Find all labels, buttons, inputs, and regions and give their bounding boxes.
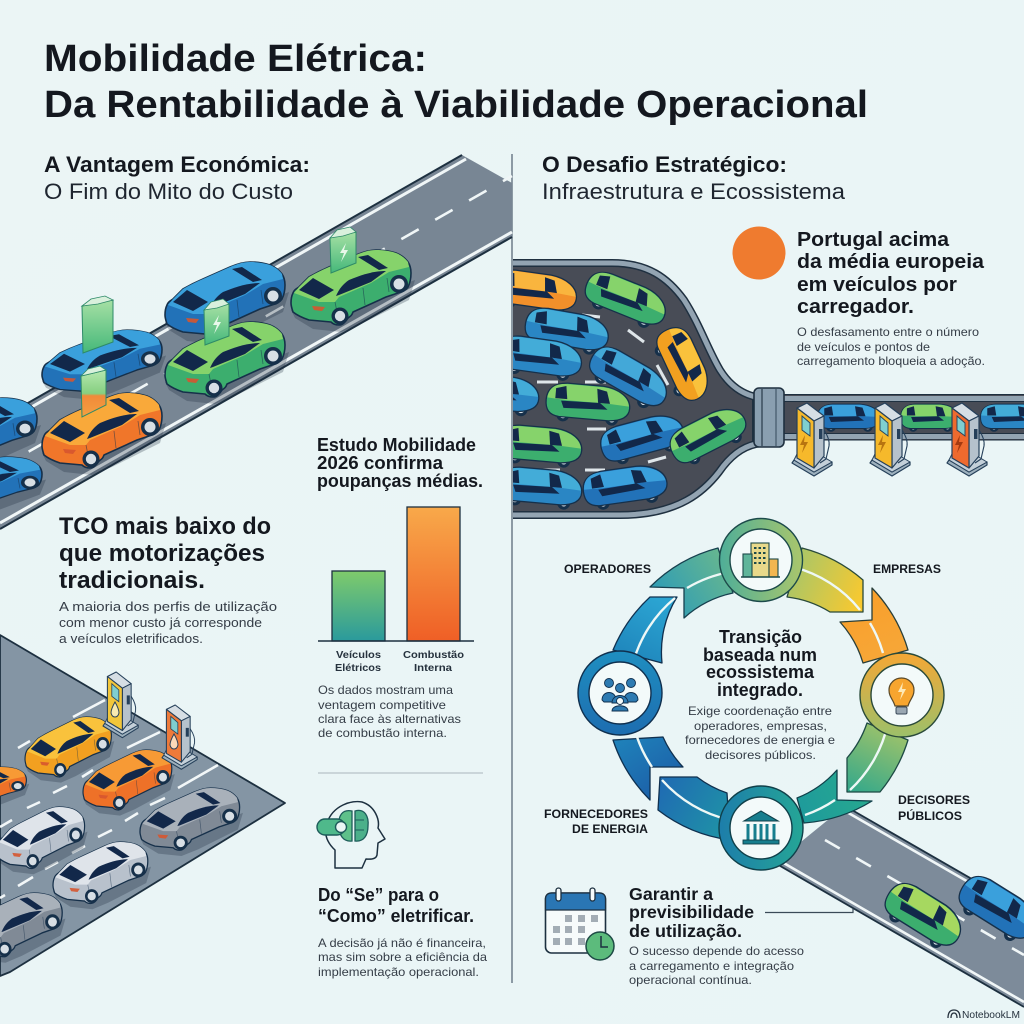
- node: people: [578, 651, 662, 735]
- icon: battery full with bolt 1: [330, 227, 356, 273]
- text block: TCO: tradicionais.: [59, 567, 205, 594]
- segment: right lower: [847, 723, 908, 792]
- text block: ring centre: operadores, empresas,: [694, 719, 827, 733]
- heading: economic advantage: A Vantagem Económica:: [44, 152, 310, 177]
- icon: charger orange: [947, 403, 987, 476]
- heading: economic advantage: O Fim do Mito do Custo: [44, 179, 293, 204]
- axis labels: [335, 649, 464, 674]
- text block: ring centre: Exige coordenação entre: [688, 704, 832, 718]
- car: blue on road: [951, 869, 1024, 949]
- text block: predictability: a carregamento e integração: [629, 959, 794, 973]
- heading: strategic challenge: [542, 152, 846, 204]
- car: green in tube: [901, 404, 959, 432]
- text block: competitive advantage: [318, 683, 461, 740]
- car: blue clipped low: [0, 457, 46, 518]
- text block: ring centre: baseada num: [703, 645, 817, 665]
- icon: calendar with clock: [546, 888, 614, 960]
- text block: competitive advantage: de combustão interna.: [318, 726, 447, 740]
- label: public decision makers: DECISORES: [898, 793, 970, 807]
- orange circle marker: [732, 226, 786, 280]
- segment: left lower: [613, 737, 683, 800]
- icon: battery full with bolt 2: [204, 299, 229, 345]
- road: lower left with combustion cars: [0, 635, 285, 976]
- node: buildings: [720, 518, 802, 602]
- node: light bulb: [860, 653, 944, 737]
- text block: predictability: Garantir a: [629, 884, 713, 904]
- car: blue in tube: [818, 404, 880, 432]
- car: orange: [83, 750, 175, 816]
- text block: ring centre: Transição: [719, 627, 802, 647]
- text block: from if to how: mas sim sobre a eficiência da: [318, 950, 487, 964]
- icon: battery full: [82, 296, 113, 353]
- text block: from if to how: implementação operacional.: [318, 965, 479, 979]
- text block: ring centre: decisores públicos.: [705, 748, 816, 762]
- icon: orange fuel pump: [162, 705, 197, 769]
- car: silver: [53, 842, 151, 909]
- icon: battery half orange: [81, 366, 106, 417]
- segment: right upper: [840, 588, 908, 663]
- bar: internal combustion: [407, 507, 460, 641]
- heading: strategic challenge: Infraestrutura e Ecossistema: [542, 179, 846, 204]
- label: companies: EMPRESAS: [873, 562, 941, 576]
- car: yellow diagonal: [654, 327, 708, 401]
- car: blue 5: [513, 466, 582, 510]
- car: blue clipped: [513, 376, 540, 416]
- label: energy suppliers: [544, 807, 648, 836]
- text block: Portugal: em veículos por: [797, 273, 957, 296]
- text block: ring centre: ecossistema: [706, 662, 815, 682]
- text block: TCO: que motorizações: [59, 540, 265, 567]
- car: orange in pipe: [513, 269, 578, 310]
- text block: ring centre: fornecedores de energia e: [685, 733, 835, 747]
- bottleneck pipe with crowded cars: [454, 263, 1024, 515]
- axis labels: Interna: [414, 662, 452, 674]
- text block: from if to how: [318, 884, 487, 979]
- car: blue in tube right: [980, 404, 1024, 432]
- car: dark grey clipped: [0, 893, 65, 963]
- segment: bottom left: [658, 777, 730, 840]
- car: silver left: [0, 807, 88, 874]
- label: public decision makers: PÚBLICOS: [898, 808, 962, 823]
- car: green on road: [877, 876, 969, 956]
- text block: TCO: a veículos eletrificados.: [59, 632, 203, 646]
- segment: bottom right: [797, 770, 872, 823]
- node: government building: [719, 786, 803, 870]
- text heading: study 2026: poupanças médias.: [317, 471, 483, 491]
- road: lower right: [775, 806, 1024, 1007]
- icon: head with brain and toggle: [317, 802, 385, 868]
- car: blue clipped: [0, 398, 41, 472]
- text block: TCO: [59, 513, 277, 646]
- car: blue 1: [524, 308, 609, 355]
- text block: Portugal: carregador.: [797, 295, 914, 318]
- axis labels: Elétricos: [335, 662, 381, 674]
- text block: Portugal: da média europeia: [797, 250, 985, 273]
- flange: [754, 388, 784, 447]
- title: Mobilidade Elétrica:: [44, 38, 427, 80]
- segment: top left: [650, 548, 733, 618]
- car: blue 3: [589, 346, 667, 408]
- axis labels: Veículos: [336, 649, 381, 661]
- text block: Portugal: [797, 228, 985, 368]
- axis labels: Combustão: [403, 649, 464, 661]
- icon: yellow fuel pump: [103, 672, 138, 738]
- text block: competitive advantage: ventagem competitive: [318, 698, 446, 712]
- text heading: study 2026: 2026 confirma: [317, 453, 444, 473]
- text block: predictability: de utilização.: [629, 921, 742, 941]
- callout line: [765, 909, 853, 912]
- bar: electric vehicles: [332, 571, 385, 641]
- road: upper left with electric cars: [0, 155, 512, 529]
- text block: predictability: O sucesso depende do acesso: [629, 944, 804, 958]
- car: green with battery: [291, 250, 415, 332]
- text block: Portugal: Portugal acima: [797, 228, 950, 251]
- car: blue 2: [513, 335, 582, 381]
- text block: predictability: previsibilidade: [629, 902, 754, 922]
- car: blue front: [42, 330, 166, 400]
- narrow pipe: [784, 394, 1024, 440]
- text block: ring centre: integrado.: [717, 680, 803, 700]
- heading: economic advantage: [44, 152, 310, 204]
- text block: predictability: operacional contínua.: [629, 973, 752, 987]
- text block: Portugal: de veículos e pontos de: [797, 340, 930, 354]
- text block: TCO: A maioria dos perfis de utilização: [59, 600, 277, 614]
- text block: competitive advantage: clara face às alternativas: [318, 712, 461, 726]
- icon: charger yellow 1: [792, 403, 832, 476]
- bar chart: cost comparison: [318, 507, 474, 674]
- text block: from if to how: A decisão já não é financeira,: [318, 936, 486, 950]
- car: green 3: [513, 424, 582, 468]
- car: blue 4: [600, 415, 683, 464]
- text block: competitive advantage: Os dados mostram uma: [318, 683, 453, 697]
- car: blue rear: [165, 262, 289, 344]
- watermark: NotebookLM: NotebookLM: [962, 1009, 1020, 1021]
- car: orange clipped: [0, 767, 29, 813]
- text block: TCO: TCO mais baixo do: [59, 513, 271, 540]
- car: orange: [42, 393, 166, 475]
- car: green 4: [670, 408, 746, 464]
- title: Da Rentabilidade à Viabilidade Operacional: [44, 84, 868, 126]
- text heading: study 2026: Estudo Mobilidade: [317, 435, 476, 455]
- label: energy suppliers: DE ENERGIA: [572, 822, 648, 836]
- text block: from if to how: “Como” eletrificar.: [318, 905, 474, 926]
- label: public decision makers: [898, 793, 970, 823]
- segment: left upper: [613, 597, 677, 663]
- centre vertical divider: [511, 154, 513, 983]
- icon: charger yellow 2: [870, 403, 910, 476]
- text block: TCO: com menor custo já corresponde: [59, 616, 262, 630]
- car: green 2: [544, 381, 631, 427]
- car: green 1: [584, 272, 666, 328]
- text block: from if to how: Do “Se” para o: [318, 884, 439, 905]
- title: [44, 38, 868, 126]
- text block: predictability: [629, 884, 804, 987]
- car: blue 6: [582, 465, 668, 510]
- label: operators: OPERADORES: [564, 562, 651, 576]
- car: green middle: [165, 322, 289, 404]
- text block: Portugal: O desfasamento entre o número: [797, 325, 979, 339]
- heading: strategic challenge: O Desafio Estratégico:: [542, 152, 787, 177]
- car: dark grey: [140, 788, 243, 856]
- text heading: study 2026: [317, 435, 483, 491]
- segment: top right: [787, 548, 863, 612]
- text block: ring centre: [685, 627, 835, 762]
- car: yellow: [25, 717, 114, 783]
- label: energy suppliers: FORNECEDORES: [544, 807, 648, 821]
- ecosystem ring: [578, 518, 944, 870]
- text block: Portugal: carregamento bloqueia a adoção.: [797, 354, 985, 368]
